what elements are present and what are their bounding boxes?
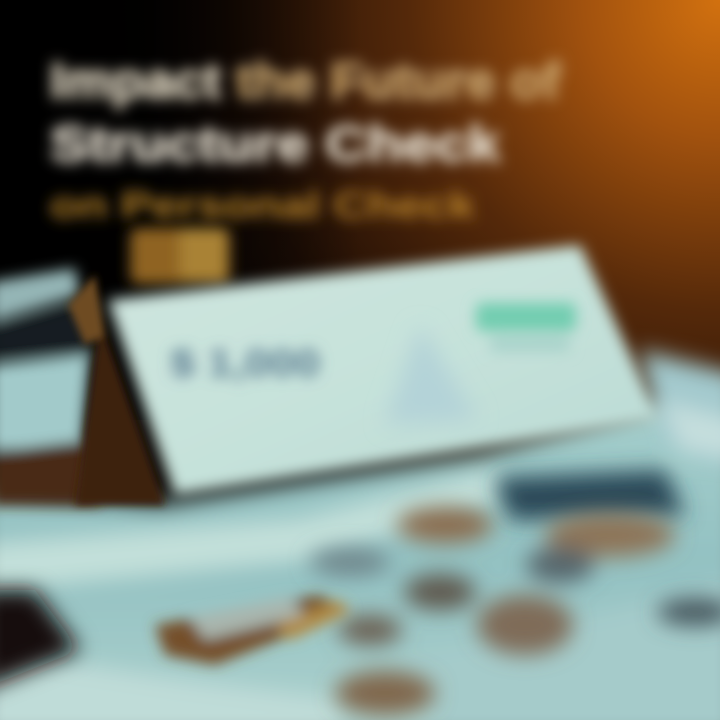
green badge: [476, 303, 576, 352]
lower paper surface: [0, 350, 720, 720]
title line 3: on Personal Check: [50, 185, 476, 227]
dark slip under card: [0, 400, 720, 690]
title text: [50, 53, 560, 227]
card amount text: $ 1,000: [170, 343, 320, 385]
coin stack behind the card: [130, 228, 230, 284]
card chart triangle: [385, 325, 478, 425]
coin group right: [310, 507, 720, 715]
left stacked papers and brown wedge: [0, 268, 165, 505]
main check card: [108, 245, 660, 495]
title line 2: Structure Check: [50, 116, 500, 172]
gold bar coin: [155, 595, 350, 665]
title line 1: Impact the Future of: [50, 53, 560, 109]
coins scattered on the paper: [155, 507, 720, 715]
